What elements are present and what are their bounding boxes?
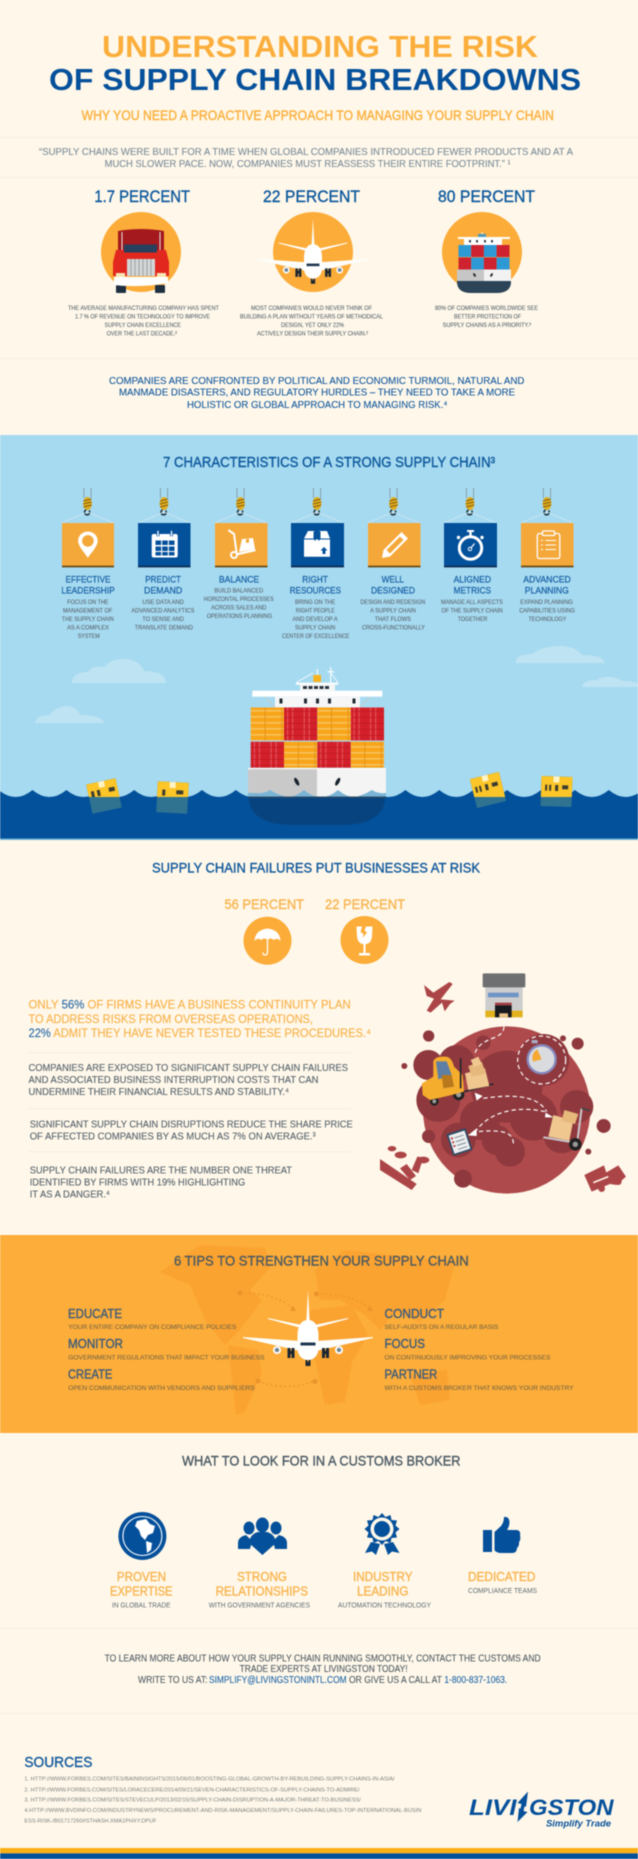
tips: right column: PARTNER <box>384 1368 437 1382</box>
label <box>61 574 115 640</box>
text block: call to action: WRITE TO US AT: <box>138 1675 208 1686</box>
label <box>216 1570 308 1598</box>
label: ACROSS SALES AND <box>211 606 267 612</box>
item: proven expertise <box>110 1512 172 1610</box>
tips: left column: CREATE <box>68 1368 112 1382</box>
footer bars <box>0 1848 638 1859</box>
icon: thumbs up <box>483 1517 520 1553</box>
label: LEADERSHIP <box>61 586 115 596</box>
text block: number one threat: IT AS A DANGER.⁴ <box>30 1189 110 1200</box>
label: TO SENSE AND <box>142 617 185 623</box>
stat: 80 percent <box>435 188 538 329</box>
stat text <box>240 306 384 338</box>
label: DESIGNED <box>371 586 415 596</box>
label: RELATIONSHIPS <box>216 1584 308 1598</box>
heading: SUPPLY CHAIN FAILURES PUT BUSINESSES AT RISK <box>152 860 480 876</box>
label: EFFECTIVE <box>66 574 110 586</box>
text block: interruption costs: COMPANIES ARE EXPOSED TO SIGNIFICANT SUPPLY CHAIN FAILURES <box>28 1063 348 1074</box>
subtitle: WHY YOU NEED A PROACTIVE APPROACH TO MANAGING YOUR SUPPLY CHAIN <box>82 108 554 123</box>
icon: clipboard <box>537 531 560 558</box>
hand cart with boxes <box>543 1108 590 1151</box>
callout: continuity plan <box>28 998 371 1040</box>
callout: continuity plan: 22% ADMIT THEY HAVE NEVER TESTED THESE PROCEDURES.⁴ <box>28 1026 371 1040</box>
stat text: DESIGN, YET ONLY 22% <box>281 323 345 329</box>
dotted route arcs <box>240 1293 370 1386</box>
label: BUILD BALANCED <box>214 588 264 594</box>
label: STRONG <box>237 1570 287 1584</box>
stat text: THE AVERAGE MANUFACTURING COMPANY HAS SPENT <box>68 306 219 312</box>
stopwatch <box>528 1040 556 1073</box>
stat text: OVER THE LAST DECADE.² <box>107 332 177 338</box>
stat: 1.7 percent: 1.7 PERCENT <box>94 188 190 206</box>
label: MANAGEMENT OF <box>63 608 113 614</box>
label: PLANNING <box>525 586 569 596</box>
label: PROVEN <box>117 1570 166 1584</box>
label: TOGETHER <box>458 617 488 623</box>
panel: 6 tips <box>0 1235 638 1433</box>
text block: intro statement <box>109 375 525 411</box>
heading: SOURCES <box>24 1754 92 1771</box>
title <box>49 29 581 97</box>
icon: package <box>304 531 330 557</box>
label: TRANSLATE DEMAND <box>135 626 194 632</box>
tips: right column: SELF-AUDITS ON A REGULAR BASIS <box>384 1324 499 1331</box>
icon: stopwatch <box>457 530 484 559</box>
label: CAPABILITIES USING <box>519 608 575 614</box>
label: FOCUS ON THE <box>67 600 109 606</box>
stat text: BETTER PROTECTION OF <box>454 314 521 320</box>
text block: intro statement: MANMADE DISASTERS, AND REGULATORY HURDLES – THEY NEED TO TAKE A MORE <box>119 387 515 399</box>
tips: left column: MONITOR <box>68 1337 123 1351</box>
source list <box>24 1777 422 1825</box>
label: CENTER OF EXCELLENCE <box>282 634 350 640</box>
item: balance <box>204 488 274 620</box>
label <box>353 1570 413 1598</box>
label: ADVANCED ANALYTICS <box>131 608 194 614</box>
stat: 80 percent: 80 PERCENT <box>438 188 535 206</box>
dashed routes <box>474 1027 566 1143</box>
forklift <box>422 1057 493 1106</box>
tips: left column: EDUCATE <box>68 1307 122 1321</box>
text block: call to action <box>105 1654 541 1686</box>
item: effective leadership <box>61 488 115 640</box>
heading: WHAT TO LOOK FOR IN A CUSTOMS BROKER <box>182 1452 460 1468</box>
label: LEADING <box>357 1584 408 1598</box>
label: WELL <box>382 574 405 586</box>
text block: intro statement: HOLISTIC OR GLOBAL APPROACH TO MANAGING RISK.⁴ <box>187 399 448 411</box>
text block: call to action: TRADE EXPERTS AT LIVINGSTON TODAY! <box>240 1664 408 1675</box>
label: THAT FLOWS <box>375 617 411 623</box>
label: SUPPLY CHAIN <box>295 626 335 632</box>
stat: 22 percent: 22 PERCENT <box>325 896 405 912</box>
stat: 1.7 percent <box>68 188 219 338</box>
item: right resources <box>282 488 350 640</box>
title: UNDERSTANDING THE RISK <box>102 29 539 64</box>
label <box>110 1570 172 1598</box>
tips: right column: FOCUS <box>384 1337 425 1351</box>
source list: ESS-RISK-/B01717260#STHASH.XMA1PHXY.DPUF <box>24 1819 157 1825</box>
icon: hand truck <box>229 530 256 558</box>
tips: right column: ON CONTINUOUSLY IMPROVING YOUR PROCESSES <box>384 1354 551 1361</box>
label: PREDICT <box>145 574 181 586</box>
world map <box>160 1245 455 1415</box>
stat text <box>435 306 538 329</box>
label: EXPERTISE <box>110 1584 172 1598</box>
stat text: SUPPLY CHAIN EXCELLENCE <box>104 323 181 329</box>
text block: intro statement: COMPANIES ARE CONFRONTED BY POLITICAL AND ECONOMIC TURMOIL, NATURAL AND <box>109 375 525 387</box>
text block: call to action: TO LEARN MORE ABOUT HOW YOUR SUPPLY CHAIN RUNNING SMOOTHLY, CONTACT THE CUSTOMS AND <box>105 1654 541 1664</box>
text block: interruption costs: UNDERMINE THEIR FINANCIAL RESULTS AND STABILITY.⁴ <box>28 1087 289 1098</box>
item: dedicated <box>468 1517 537 1595</box>
icon: pencil <box>382 532 408 558</box>
label: A SUPPLY CHAIN <box>370 608 416 614</box>
text block: number one threat: IDENTIFIED BY FIRMS WITH 19% HIGHLIGHTING <box>30 1177 245 1188</box>
container ship <box>248 667 386 825</box>
label: RESOURCES <box>290 586 341 596</box>
stat text: BUILDING A PLAN WITHOUT YEARS OF METHODICAL <box>240 314 384 320</box>
icon: people <box>238 1518 287 1555</box>
icon: airplane <box>257 212 369 292</box>
logo: Livingston <box>469 1792 614 1830</box>
text block: number one threat <box>30 1165 292 1200</box>
callout: continuity plan: TO ADDRESS RISKS FROM OVERSEAS OPERATIONS, <box>28 1012 313 1026</box>
source list: 2. HTTP://WWW.FORBES.COM/SITES/LORACECERE/2014/09/21/SEVEN-CHARACTERISTICS-OF-SUPPLY-CHAINS-TO-ADMIRE/ <box>24 1787 360 1793</box>
stat: 22 percent <box>325 896 405 964</box>
stat text: 80% OF COMPANIES WORLDWIDE SEE <box>435 306 538 312</box>
callout: continuity plan: ONLY 56% OF FIRMS HAVE A BUSINESS CONTINUITY PLAN <box>28 998 351 1012</box>
icon: calendar <box>152 532 178 558</box>
stat: 56 percent <box>224 896 304 965</box>
icon: container ship <box>442 212 522 293</box>
heading: 6 TIPS TO STRENGTHEN YOUR SUPPLY CHAIN <box>174 1253 469 1269</box>
text block: share price <box>30 1120 353 1143</box>
label: ALIGNED <box>454 574 491 586</box>
tips: left column <box>68 1307 265 1392</box>
label <box>360 574 425 632</box>
logo: Livingston: LIVI <box>469 1795 517 1820</box>
stat text: ACTIVELY DESIGN THEIR SUPPLY CHAIN.² <box>257 332 368 338</box>
stat text: SUPPLY CHAINS AS A PRIORITY.³ <box>443 323 531 329</box>
label: OPERATIONS PLANNING <box>207 614 272 620</box>
source list: 3. HTTP://WWW.FORBES.COM/SITES/STEVECULP/2013/02/15/SUPPLY-CHAIN-DISRUPTION-A-MAJOR-THREAT-TO-BUSINESS/ <box>24 1798 361 1804</box>
sublabel: IN GLOBAL TRADE <box>112 1601 171 1610</box>
item: aligned metrics <box>441 488 503 623</box>
item: industry leading <box>338 1513 431 1610</box>
label: RIGHT PEOPLE <box>296 608 335 614</box>
panel: customs broker <box>110 1452 537 1610</box>
quote: MUCH SLOWER PACE. NOW, COMPANIES MUST REASSESS THEIR ENTIRE FOOTPRINT.” ¹ <box>105 158 511 170</box>
label: INDUSTRY <box>353 1570 413 1584</box>
label: RIGHT <box>302 574 328 586</box>
text block: call to action: OR GIVE US A CALL AT <box>349 1675 442 1686</box>
panel: 7 characteristics <box>0 435 638 840</box>
clipboard <box>446 1128 472 1156</box>
panel: sources <box>24 1754 422 1825</box>
label: SYSTEM <box>78 634 100 640</box>
sublabel: AUTOMATION TECHNOLOGY <box>338 1601 431 1610</box>
clouds <box>35 646 638 723</box>
label: METRICS <box>454 586 491 596</box>
sublabel: COMPLIANCE TEAMS <box>468 1586 537 1595</box>
stat: 22 percent <box>240 188 384 338</box>
label <box>441 574 503 623</box>
label <box>204 574 274 620</box>
source list: 1. HTTP://WWW.FORBES.COM/SITES/BAININSIGHTS/2015/06/01/BOOSTING-GLOBAL-GROWTH-BY-REBUILDING-SUPPLY-CHAINS-IN-ASIA/ <box>24 1777 395 1783</box>
label: EXPAND PLANNING <box>520 600 573 606</box>
label: BALANCE <box>219 574 259 586</box>
text block: call to action: SIMPLIFY@LIVINGSTONINTL.COM <box>209 1675 347 1686</box>
stat text: MOST COMPANIES WOULD NEVER THINK OF <box>251 306 372 312</box>
illustration: logistics globe <box>380 973 626 1194</box>
icon: award seal <box>364 1513 400 1555</box>
icon: map pin <box>78 532 98 558</box>
item: well designed <box>360 488 425 632</box>
dark blobs <box>401 1030 611 1188</box>
tips: left column: GOVERNMENT REGULATIONS THAT IMPACT YOUR BUSINESS <box>68 1354 265 1361</box>
tips: left column: YOUR ENTIRE COMPANY ON COMPLIANCE POLICIES <box>68 1324 237 1331</box>
stat: 22 percent: 22 PERCENT <box>263 188 360 206</box>
title: OF SUPPLY CHAIN BREAKDOWNS <box>49 62 581 97</box>
quote <box>39 146 573 170</box>
item: predict demand <box>131 488 194 632</box>
icon: broken glass <box>340 916 388 964</box>
truck silhouette <box>584 1165 626 1192</box>
text block: interruption costs: AND ASSOCIATED BUSINESS INTERRUPTION COSTS THAT CAN <box>28 1075 318 1086</box>
text block: call to action: 1-800-837-1063. <box>444 1675 507 1686</box>
item: advanced planning <box>519 488 575 623</box>
item: strong relationships <box>209 1518 310 1610</box>
sea <box>0 790 638 840</box>
source list: 4.HTTP://WWW.BVDINFO.COM/INDUSTRYNEWS/PROCUREMENT-AND-RISK-MANAGEMENT/SUPPLY-CHAIN-FAILURES-TOP-INTERNATIONAL-BUSIN <box>24 1808 422 1814</box>
panel: key statistics <box>68 188 538 411</box>
icon: truck <box>101 212 181 293</box>
sublabel: WITH GOVERNMENT AGENCIES <box>209 1601 310 1610</box>
label: THE SUPPLY CHAIN <box>62 617 114 623</box>
icon: globe <box>118 1512 166 1560</box>
logo: Livingston: Simplify Trade <box>546 1819 612 1830</box>
label <box>519 574 575 623</box>
label: DEDICATED <box>468 1570 535 1584</box>
panel: header <box>0 29 638 358</box>
label: ADVANCED <box>523 574 571 586</box>
label: MANAGE ALL ASPECTS <box>441 600 503 606</box>
warehouse <box>483 973 525 1017</box>
label <box>131 574 194 632</box>
panel: supply chain failures <box>28 860 626 1200</box>
factory and ship silhouette <box>380 1146 429 1190</box>
text block: interruption costs <box>28 1063 348 1098</box>
label <box>282 574 350 640</box>
icon: airplane <box>243 1290 373 1366</box>
label: TECHNOLOGY <box>528 617 566 623</box>
text block: number one threat: SUPPLY CHAIN FAILURES ARE THE NUMBER ONE THREAT <box>30 1165 292 1176</box>
stat text <box>68 306 219 338</box>
text block: share price: OF AFFECTED COMPANIES BY AS MUCH AS 7% ON AVERAGE.³ <box>30 1132 316 1143</box>
label: CROSS-FUNCTIONALLY <box>362 626 425 632</box>
floating cargo boxes <box>86 772 573 814</box>
label: USE DATA AND <box>142 600 185 606</box>
text block: share price: SIGNIFICANT SUPPLY CHAIN DISRUPTIONS REDUCE THE SHARE PRICE <box>30 1120 353 1131</box>
label: BRING ON THE <box>295 600 335 606</box>
tips: right column: WITH A CUSTOMS BROKER THAT KNOWS YOUR INDUSTRY <box>384 1385 574 1392</box>
label: HORIZONTAL PROCESSES <box>204 597 274 603</box>
label: DEMAND <box>144 586 182 596</box>
tips: left column: OPEN COMMUNICATION WITH VENDORS AND SUPPLIERS <box>68 1385 255 1392</box>
quote: “SUPPLY CHAINS WERE BUILT FOR A TIME WHEN GLOBAL COMPANIES INTRODUCED FEWER PRODUCTS AND AT A <box>39 146 573 158</box>
label: AS A COMPLEX <box>67 626 109 632</box>
label: OF THE SUPPLY CHAIN <box>441 608 503 614</box>
label: DESIGN AND REDESIGN <box>360 600 425 606</box>
stat text: 1.7 % OF REVENUE ON TECHNOLOGY TO IMPROVE <box>75 314 210 320</box>
heading: 7 CHARACTERISTICS OF A STRONG SUPPLY CHAIN³ <box>163 455 495 471</box>
tips: right column: CONDUCT <box>384 1307 444 1321</box>
tips: right column <box>384 1307 574 1392</box>
logo: Livingston: GSTON <box>529 1795 614 1820</box>
plane silhouette <box>424 982 455 1013</box>
stat: 56 percent: 56 PERCENT <box>224 896 304 912</box>
icon: umbrella <box>244 917 292 965</box>
label: AND DEVELOP A <box>292 617 338 623</box>
